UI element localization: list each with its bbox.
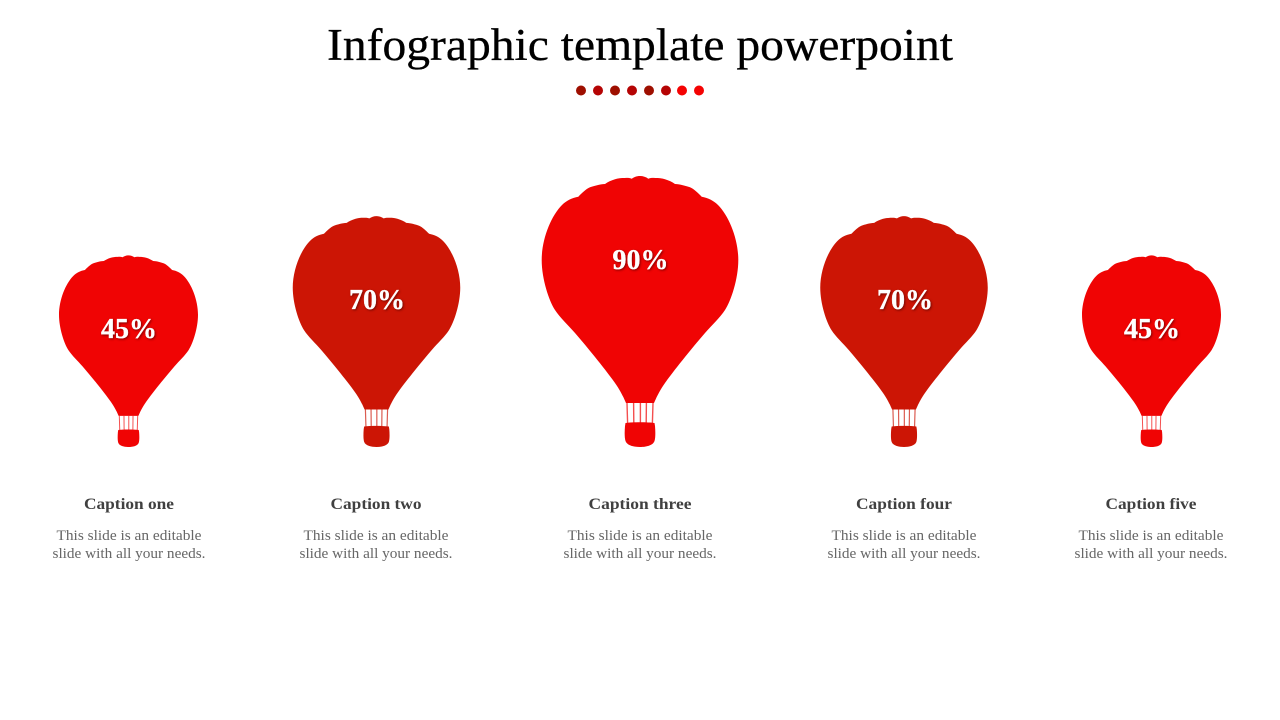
caption five: slide with all your needs. xyxy=(1074,546,1228,562)
balloon four 70%: 70% xyxy=(877,285,933,316)
caption five: Caption five xyxy=(1106,496,1197,513)
caption four: This slide is an editable xyxy=(832,528,977,544)
title: Infographic template powerpoint xyxy=(327,20,954,70)
caption five xyxy=(1074,496,1228,562)
dotted divider xyxy=(576,86,704,96)
caption one: Caption one xyxy=(84,496,174,513)
caption four: Caption four xyxy=(856,496,952,513)
balloon four 70% xyxy=(820,216,988,447)
balloon one 45%: 45% xyxy=(101,314,157,345)
balloon one 45% xyxy=(59,255,198,447)
caption one xyxy=(52,496,206,562)
caption two: This slide is an editable xyxy=(304,528,449,544)
caption three: Caption three xyxy=(588,496,692,513)
caption three: This slide is an editable xyxy=(568,528,713,544)
balloon five 45%: 45% xyxy=(1124,314,1180,345)
caption one: This slide is an editable xyxy=(56,528,202,544)
caption three: slide with all your needs. xyxy=(564,546,716,562)
caption two: Caption two xyxy=(330,496,422,513)
caption five: This slide is an editable xyxy=(1078,528,1224,544)
caption two: slide with all your needs. xyxy=(300,546,452,562)
balloon two 70% xyxy=(293,216,460,447)
caption three xyxy=(564,496,716,562)
caption four: slide with all your needs. xyxy=(828,546,980,562)
caption two xyxy=(300,496,452,562)
caption four xyxy=(828,496,980,562)
balloon five 45% xyxy=(1082,255,1221,447)
balloon three 90%: 90% xyxy=(612,245,668,276)
balloon three 90% xyxy=(542,176,738,447)
balloon two 70%: 70% xyxy=(349,285,405,316)
caption one: slide with all your needs. xyxy=(52,546,206,562)
